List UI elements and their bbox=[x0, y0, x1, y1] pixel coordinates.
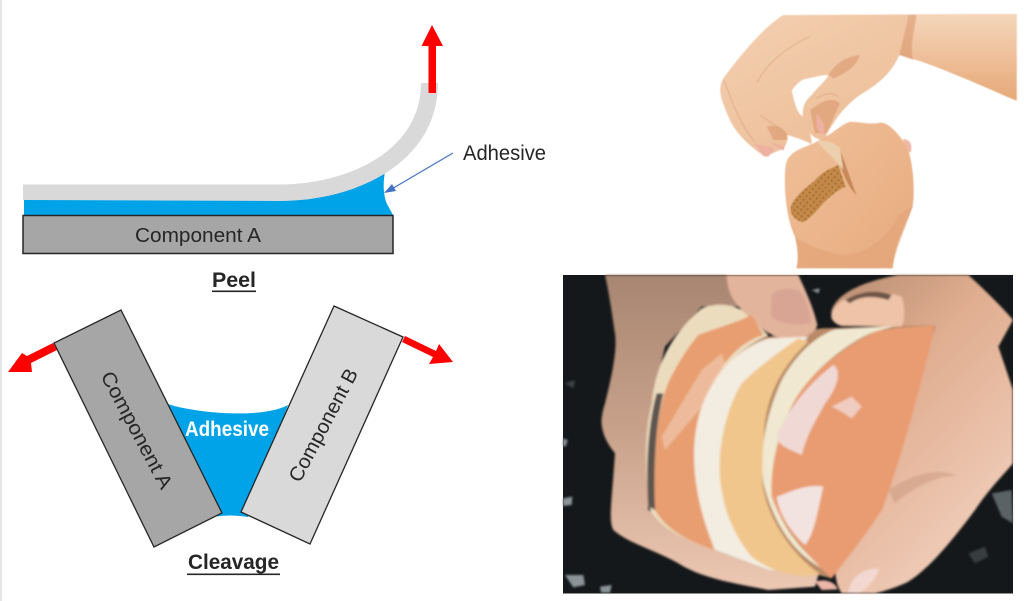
wrist shading bbox=[795, 207, 913, 268]
back pastry crumb bbox=[654, 315, 763, 550]
peel heading: Peel bbox=[212, 269, 256, 292]
front pastry cream bbox=[762, 326, 895, 570]
back pastry shell bbox=[646, 305, 768, 550]
middle pastry cream bbox=[694, 337, 818, 575]
left hand bbox=[602, 275, 818, 590]
adhesive pointer arrow bbox=[384, 153, 453, 193]
front pastry crumb bbox=[771, 325, 935, 578]
right thumb shadow bbox=[845, 292, 892, 303]
forearm tone bbox=[899, 14, 1017, 101]
finger shading bbox=[767, 15, 917, 140]
salt patch lower bbox=[777, 486, 823, 545]
cleavage heading: Cleavage bbox=[188, 551, 279, 574]
dark stone background bbox=[563, 275, 1013, 593]
fingernails bbox=[754, 113, 824, 157]
panel: cleavage diagram bbox=[8, 306, 453, 575]
right hand bbox=[831, 275, 1013, 593]
component A block bbox=[54, 310, 222, 547]
faint lower rule bbox=[797, 274, 1013, 275]
salt patch upper bbox=[777, 365, 838, 455]
panel: peel diagram bbox=[23, 25, 546, 292]
right thumb tip bbox=[831, 293, 904, 327]
bandage flap bbox=[817, 141, 843, 170]
adhesive wedge bbox=[168, 404, 288, 517]
right bottom thumbnail bbox=[848, 568, 879, 593]
photo: hands pressing layered pastry bbox=[563, 275, 1013, 593]
back pastry salt dusting bbox=[662, 353, 725, 450]
back pastry burnt edge bbox=[647, 393, 663, 510]
component A bar bbox=[23, 216, 393, 254]
peeling strip bbox=[23, 83, 438, 201]
skin fold shadow bbox=[839, 150, 857, 195]
stone specks bbox=[563, 288, 1013, 593]
knuckle nail bbox=[903, 139, 911, 153]
adhesive layer bbox=[24, 172, 393, 215]
component A block: Component A bbox=[96, 368, 177, 494]
red pull arrow bbox=[422, 25, 443, 93]
adhesive label: Adhesive bbox=[463, 142, 546, 165]
left thumbnail bbox=[771, 289, 810, 325]
right red arrow bbox=[402, 336, 453, 364]
finger creases bbox=[724, 37, 838, 142]
palm crease shadow bbox=[888, 472, 958, 503]
bottom fingertip bbox=[815, 580, 838, 590]
image contents bbox=[563, 275, 1013, 593]
lower hand bbox=[785, 122, 914, 268]
component B block bbox=[241, 306, 403, 544]
salt patch small bbox=[832, 397, 862, 418]
left red arrow bbox=[8, 343, 57, 372]
bandage mesh bbox=[791, 165, 846, 222]
left thumb bbox=[727, 275, 817, 339]
component A bar: Component A bbox=[135, 225, 262, 247]
upper hand and arm bbox=[720, 14, 1017, 157]
photo: hand peeling a bandage bbox=[720, 14, 1017, 275]
middle pastry crumb bbox=[720, 338, 820, 576]
pastry base underlay bbox=[646, 308, 935, 578]
left edge strip bbox=[0, 0, 2, 601]
adhesive label white: Adhesive bbox=[185, 418, 269, 441]
component B block: Component B bbox=[285, 365, 363, 486]
